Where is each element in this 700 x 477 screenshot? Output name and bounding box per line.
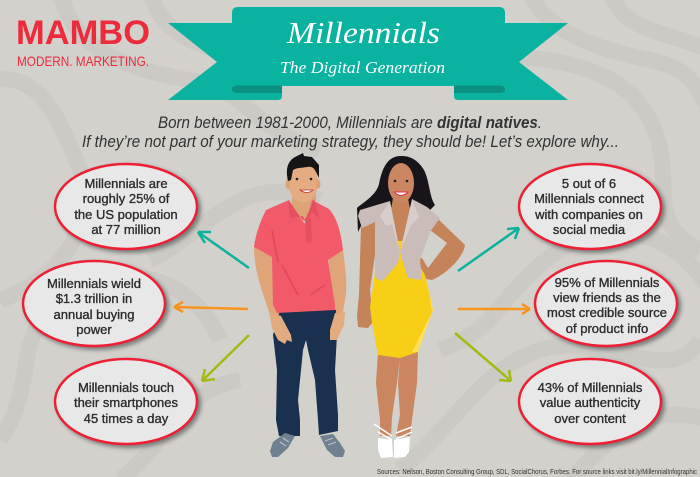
- callout: authenticity: 43% of Millennials: [538, 380, 643, 395]
- callout: smartphones: 45 times a day: [84, 411, 169, 426]
- illustration: woman: [357, 156, 465, 458]
- woman hair: [357, 156, 435, 232]
- callout: buying power: Millennials wield: [47, 276, 141, 291]
- woman legs: [376, 350, 418, 436]
- callout: population: at 77 million: [91, 222, 161, 237]
- arrow: orange right: [458, 304, 530, 314]
- banner ribbon: [168, 7, 568, 100]
- illustration: man: [254, 153, 346, 457]
- callout: smartphones: Millennials touch: [78, 380, 174, 395]
- woman jacket: [358, 199, 440, 281]
- callout: friends: [535, 261, 681, 350]
- callout: social media: social media: [553, 222, 626, 237]
- man shirt: [254, 200, 343, 313]
- callout: buying power: power: [76, 322, 112, 337]
- callout: buying power: $1.3 trillion in: [56, 291, 132, 306]
- arrow: teal right: [458, 228, 519, 271]
- banner subtitle: The Digital Generation: [280, 58, 445, 77]
- woman dress: [370, 240, 433, 358]
- callout: authenticity: [519, 359, 665, 448]
- man arms: [254, 247, 284, 318]
- man shoes: [270, 433, 295, 457]
- logo wordmark: MAMBO: [16, 14, 150, 52]
- callout: friends: view friends as the: [553, 290, 661, 305]
- logo tagline: MODERN. MARKETING.: [17, 53, 149, 69]
- arrow: green right: [455, 333, 511, 381]
- callout: smartphones: their smartphones: [74, 395, 179, 410]
- man neck: [291, 190, 316, 222]
- intro text: Born between 1981-2000, Millennials are digital natives.: [158, 113, 542, 132]
- intro text: If they’re not part of your marketing strategy, they should be! Let’s explore why...: [82, 132, 619, 151]
- woman left arm: [357, 222, 375, 328]
- callout: social media: with companies on: [534, 207, 643, 222]
- callout: authenticity: over content: [554, 411, 626, 426]
- callout: social media: 5 out of 6: [562, 176, 616, 191]
- man hair: [287, 153, 319, 181]
- banner title: Millennials: [286, 15, 440, 50]
- callout: population: Millennials are: [84, 176, 168, 191]
- callout: social media: Millennials connect: [534, 191, 644, 206]
- callout: friends: of product info: [566, 321, 648, 336]
- callout: friends: most credible source: [547, 305, 667, 320]
- arrow: teal left: [198, 232, 249, 268]
- callout: friends: 95% of Millennials: [555, 275, 660, 290]
- callout: authenticity: value authenticity: [540, 395, 641, 410]
- woman right arm: [410, 218, 465, 280]
- callout: population: roughly 25% of: [83, 191, 170, 206]
- man jeans: [273, 310, 338, 436]
- callout: buying power: [23, 261, 169, 350]
- callout: smartphones: [55, 359, 201, 448]
- man head: [288, 162, 318, 202]
- callout: population: [55, 164, 201, 253]
- callout: population: the US population: [74, 207, 178, 222]
- woman shoes: [378, 438, 393, 458]
- intro text: [82, 113, 619, 151]
- arrow: orange left: [174, 302, 248, 312]
- man hands: [269, 312, 292, 344]
- woman neck and chest: [389, 198, 412, 241]
- arrow: green left: [202, 335, 249, 381]
- callout: social media: [519, 164, 665, 253]
- logo: Mambo: [16, 14, 150, 69]
- callout: buying power: annual buying: [54, 307, 134, 322]
- woman face: [388, 163, 414, 203]
